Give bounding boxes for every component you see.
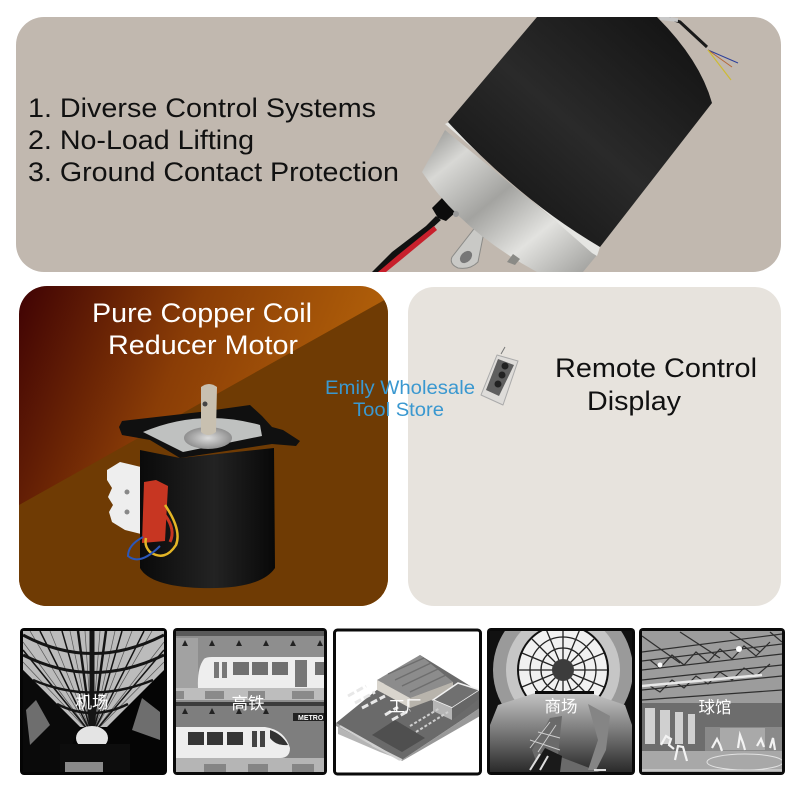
heading: remote control display — [555, 353, 757, 416]
thumbnail: high-speed rail — [173, 628, 327, 775]
watermark: store name: Emily Wholesale — [325, 378, 475, 399]
thumbnail: shopping mall — [487, 628, 635, 775]
panel: remote control display — [408, 287, 781, 606]
feature list: 2. No-Load Lifting — [28, 125, 254, 155]
heading: reducer motor: Pure Copper Coil — [92, 298, 312, 328]
thumbnail: airport — [20, 628, 167, 775]
image: DC motor — [372, 17, 738, 272]
heading: reducer motor — [92, 298, 312, 360]
label: sports hall: 球馆 — [698, 698, 732, 717]
heading: remote control display: Display — [587, 386, 682, 416]
watermark: store name: Tool Store — [353, 400, 444, 421]
label: airport: 机场 — [76, 693, 108, 712]
heading: reducer motor: Reducer Motor — [108, 330, 298, 360]
panel: pure copper coil reducer motor — [19, 286, 388, 606]
feature list: 1. Diverse Control Systems — [28, 93, 376, 123]
feature list: 3. Ground Contact Protection — [28, 157, 399, 187]
image: gear motor — [107, 384, 300, 588]
label: factory: 工厂 — [388, 698, 422, 716]
thumbnail: factory — [334, 630, 480, 774]
label: high-speed rail: 高铁 — [232, 694, 264, 713]
thumbnail: high-speed rail: METRO — [298, 715, 324, 722]
panel: features with motor — [16, 17, 781, 272]
heading: remote control display: Remote Control — [555, 353, 757, 383]
icon: remote control — [481, 347, 518, 405]
thumbnail: sports hall — [639, 628, 785, 775]
label: shopping mall: 商场 — [544, 697, 578, 716]
feature list — [28, 93, 399, 187]
watermark: store name — [325, 378, 475, 421]
